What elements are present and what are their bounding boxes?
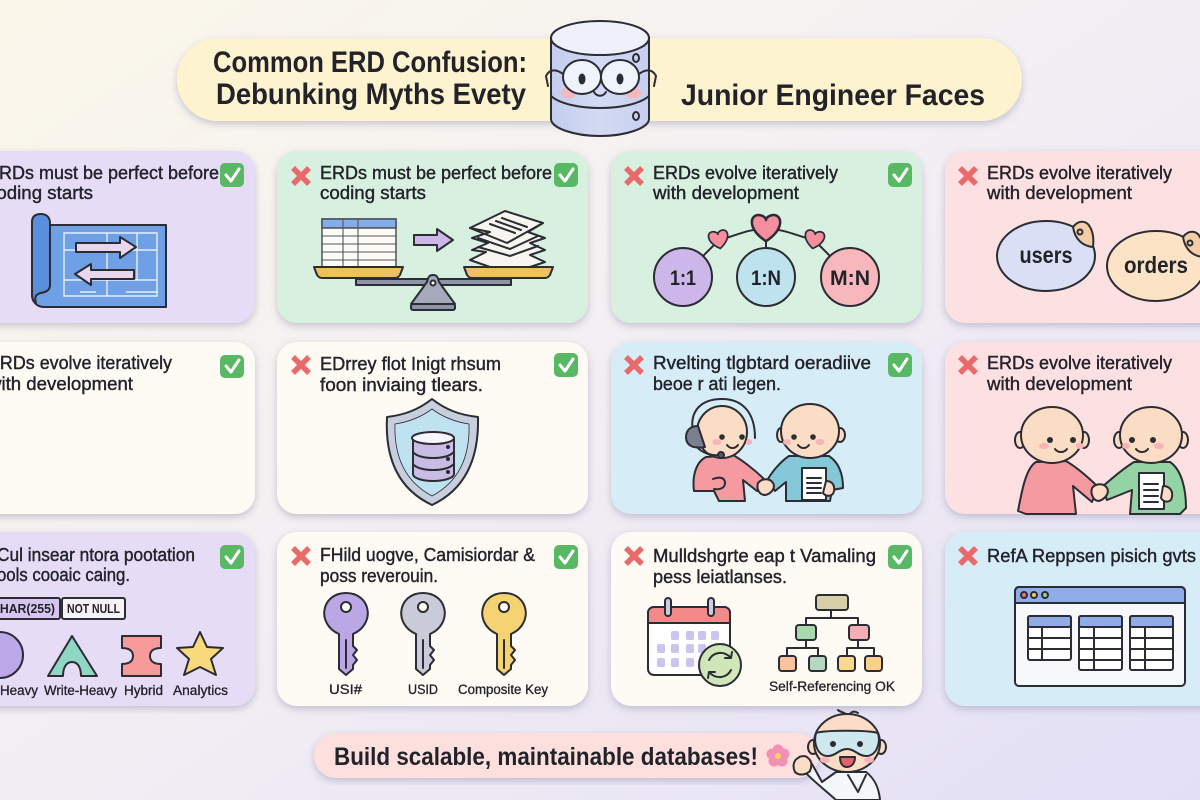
icon: handshake <box>757 479 774 495</box>
myth text <box>986 352 1173 394</box>
icon: check mark <box>554 163 578 187</box>
panel: row 3 column 2, keys <box>277 532 588 706</box>
myth text <box>0 352 173 394</box>
myth text: EDrrey flot Inigt rhsum <box>320 353 501 374</box>
myth text: with development <box>652 182 799 203</box>
icon: cross mark <box>960 168 976 184</box>
footer pill <box>314 733 819 778</box>
myth text <box>320 353 501 395</box>
icon: puzzle piece <box>122 636 161 676</box>
card background <box>611 342 922 514</box>
icon: browser window with three tables <box>1015 587 1185 686</box>
icon: database mascot with glasses <box>546 21 656 136</box>
card background <box>611 151 922 323</box>
icon: cross mark <box>293 548 309 564</box>
header: title banner with mascot <box>177 21 1022 136</box>
panel: row 1 column 3, relationship hearts <box>611 151 922 323</box>
card background <box>945 532 1200 706</box>
key labels: USID <box>408 682 438 697</box>
myth text: pess leiatlanses. <box>653 566 787 587</box>
key labels <box>329 682 548 697</box>
diagram: users and orders entities: users <box>1020 242 1072 268</box>
myth text: poss reverouin. <box>320 565 438 586</box>
myth text: ERDs evolve iteratively <box>987 162 1173 183</box>
title: Junior Engineer Faces <box>681 79 985 112</box>
myth text: Rvelting tlgbtard oeradiive <box>653 352 871 373</box>
illustration: scientist mascot with goggles <box>794 710 886 800</box>
card background <box>277 532 588 706</box>
panel: row 2 column 3, people shaking hands <box>611 342 922 514</box>
card background <box>945 151 1200 323</box>
icon: check mark <box>888 545 912 569</box>
icon: shield with database <box>387 399 478 505</box>
panel: row 2 column 1, empty cream card <box>0 342 255 514</box>
icon: cross mark <box>293 168 309 184</box>
icon: calendar with refresh <box>648 598 741 686</box>
icon: check mark <box>220 163 244 187</box>
workload labels <box>0 683 228 698</box>
icon: cross mark <box>626 168 642 184</box>
myth text: foon inviaing tlears. <box>320 374 483 395</box>
myth text: ERDs evolve iteratively <box>653 162 839 183</box>
myth text: beoe r ati legen. <box>653 373 781 394</box>
icon: flower <box>766 744 790 766</box>
myth text: ERDs evolve iteratively <box>987 352 1173 373</box>
title: Common ERD Confusion: <box>213 46 527 79</box>
illustration: support engineer with headset <box>686 399 765 501</box>
diagram: cardinality circles connected by hearts: M:N <box>830 266 870 290</box>
workload labels: Heavy <box>0 683 38 698</box>
card background <box>945 342 1200 514</box>
myth text <box>0 544 195 585</box>
diagram: users and orders entities: orders <box>1124 252 1188 278</box>
title banner pill <box>177 38 1022 121</box>
icon: blueprint with arrows <box>32 214 166 307</box>
panel: row 1 column 4, entities <box>945 151 1200 323</box>
icon: cross mark <box>626 357 642 373</box>
footer: call to action <box>314 733 819 778</box>
panel: row 3 column 4, browser with tables <box>945 532 1200 706</box>
workload labels: Analytics <box>173 683 228 698</box>
icon: handshake <box>1091 484 1108 501</box>
card background <box>0 342 255 514</box>
key labels: Composite Key <box>458 682 548 697</box>
illustration: engineer holding document <box>768 404 845 501</box>
icon: circle <box>0 632 23 678</box>
illustration: engineer in green with document <box>1102 407 1188 514</box>
diagram: self-referencing hierarchy <box>779 595 882 671</box>
myth text: RefA Reppsen pisich gvts <box>987 545 1196 566</box>
icon: cross mark <box>626 548 642 564</box>
title: Debunking Myths Evety <box>216 78 526 111</box>
myth text: coding starts <box>320 182 426 203</box>
icon: check mark <box>888 353 912 377</box>
workload labels: Hybrid <box>124 683 163 698</box>
icon: gold key <box>482 593 526 675</box>
icon: check mark <box>888 163 912 187</box>
diagram: users and orders entities <box>997 221 1200 301</box>
panel: row 1 column 1, blueprint <box>0 151 255 323</box>
myth text: Mulldshgrte eap t Vamaling <box>653 545 876 566</box>
diagram: cardinality circles connected by hearts <box>654 215 879 306</box>
diagram: cardinality circles connected by hearts: 1:N <box>751 266 781 290</box>
icon: check mark <box>220 355 244 378</box>
myth text: ERDs must be perfect before <box>320 162 552 183</box>
panel: row 2 column 2, shield <box>277 342 588 514</box>
myth text <box>653 352 871 394</box>
card background <box>277 151 588 323</box>
myth text: ools cooaic caing. <box>0 564 130 585</box>
myth text <box>652 162 839 203</box>
icon: scale weighing table against paper stack <box>314 211 553 310</box>
myth text: FHild uogve, Camisiordar & <box>320 544 536 565</box>
footer text: Build scalable, maintainable databases! <box>334 743 758 771</box>
workload labels: Write-Heavy <box>44 683 117 698</box>
key labels: USI# <box>329 682 363 697</box>
tag: NOT NULL <box>62 598 125 619</box>
icon: check mark <box>554 545 578 569</box>
panel: row 2 column 4, pair of engineers <box>945 342 1200 514</box>
icon: triangle <box>48 636 97 676</box>
panel: row 3 column 1, workload types <box>0 532 255 706</box>
diagram: cardinality circles connected by hearts: 1:1 <box>670 266 696 290</box>
icon: cross mark <box>960 548 976 564</box>
icon: cross mark <box>293 357 309 373</box>
myth text <box>986 162 1173 203</box>
illustration: engineer in pink <box>1015 407 1098 514</box>
panel: row 1 column 2, balance scale <box>277 151 588 323</box>
myth text: with development <box>986 373 1132 394</box>
myth text: with development <box>986 182 1132 203</box>
icon: star <box>177 632 223 675</box>
card background <box>0 151 255 323</box>
myth text <box>320 162 552 203</box>
myth text: Cul insear ntora pootation <box>0 544 195 565</box>
card background <box>611 532 922 706</box>
icon: cross mark <box>960 357 976 373</box>
myth text <box>653 545 876 587</box>
card background <box>277 342 588 514</box>
icon: check mark <box>554 353 578 377</box>
tag: NOT NULL: NOT NULL <box>67 601 120 616</box>
icon: check mark <box>220 545 244 569</box>
title <box>213 46 985 112</box>
myth text <box>0 162 219 203</box>
icon: silver key <box>401 593 445 675</box>
card background <box>0 532 255 706</box>
myth text <box>320 544 536 586</box>
icon: purple key <box>324 593 368 675</box>
panel: row 3 column 3, calendar and hierarchy <box>611 532 922 706</box>
diagram caption: Self-Referencing OK <box>769 679 895 694</box>
